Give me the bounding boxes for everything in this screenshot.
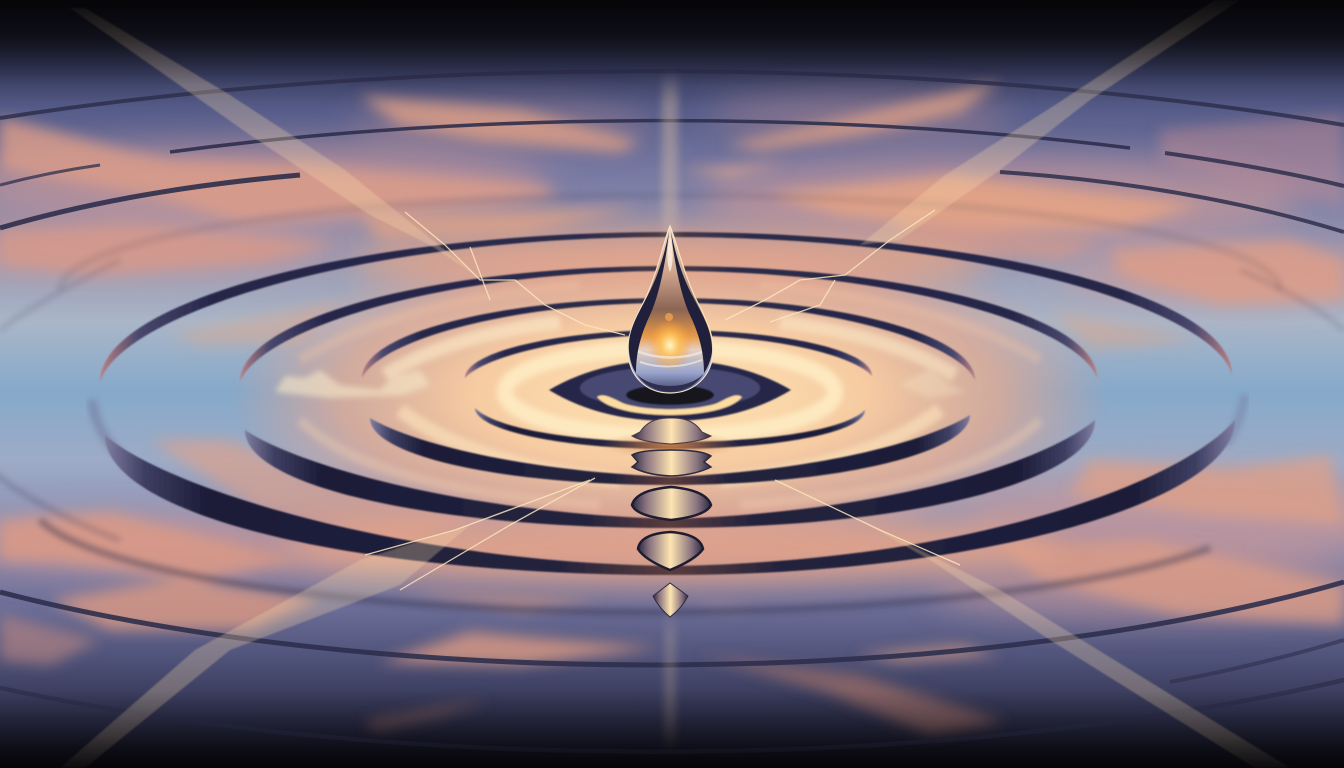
concentric ripple crescents: upper xyxy=(100,232,1232,382)
warm reflection on lower crescents xyxy=(600,431,740,459)
soft cloud haze xyxy=(0,95,1344,618)
reflection 2 xyxy=(632,450,711,476)
droplet reflections in the water xyxy=(632,418,711,617)
cream cloud highlights left and right of centre xyxy=(275,368,965,398)
reflection 3 xyxy=(632,487,711,520)
reflection 1 xyxy=(632,418,711,444)
reflection 4 xyxy=(638,532,703,570)
reflection 5 xyxy=(653,583,688,617)
concentric ripple crescents: lower xyxy=(105,408,1235,575)
light bands between ripples xyxy=(300,285,1040,505)
warm glow around the impact point xyxy=(230,230,1110,584)
central dark pit xyxy=(549,360,791,421)
water drop xyxy=(628,226,713,393)
